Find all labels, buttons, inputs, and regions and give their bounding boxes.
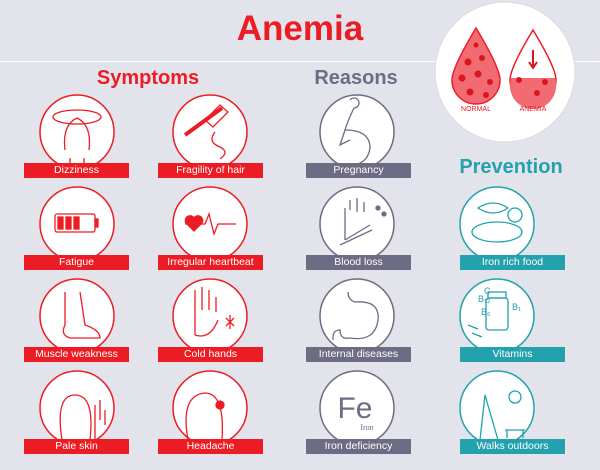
- blood drops comparison: B₆: [481, 307, 491, 317]
- labels: Vitamins: [492, 348, 533, 360]
- labels: Muscle weakness: [35, 348, 118, 360]
- labels: Fragility of hair: [176, 164, 245, 176]
- blood drops comparison: B₁: [512, 302, 521, 312]
- labels: Pregnancy: [333, 164, 384, 176]
- blood drops comparison: C: [484, 286, 491, 296]
- labels: Walks outdoors: [476, 440, 548, 452]
- labels: Iron deficiency: [325, 440, 392, 452]
- labels: Irregular heartbeat: [167, 256, 254, 268]
- heading: prevention: Prevention: [459, 156, 563, 178]
- blood drops comparison: B₁₂: [478, 294, 491, 304]
- drops circle: NORMAL: [461, 106, 491, 113]
- labels: Pale skin: [55, 440, 98, 452]
- icons: [53, 98, 525, 445]
- labels: Fatigue: [59, 256, 94, 268]
- blood drops comparison: Fe: [337, 392, 373, 425]
- heading: symptoms: Symptoms: [97, 67, 199, 89]
- labels: Headache: [187, 440, 234, 452]
- labels: Cold hands: [184, 348, 237, 360]
- drops circle: [435, 2, 575, 142]
- labels: Blood loss: [334, 256, 383, 268]
- labels: Dizziness: [54, 164, 99, 176]
- blood drops comparison: Iron: [360, 423, 374, 432]
- labels: Internal diseases: [319, 348, 398, 360]
- icon circles: [40, 95, 534, 445]
- labels: Iron rich food: [482, 256, 543, 268]
- divider line: [0, 61, 600, 62]
- heading: reasons: Reasons: [314, 67, 398, 89]
- title: Anemia: [237, 9, 363, 48]
- drops circle: ANEMIA: [520, 106, 547, 113]
